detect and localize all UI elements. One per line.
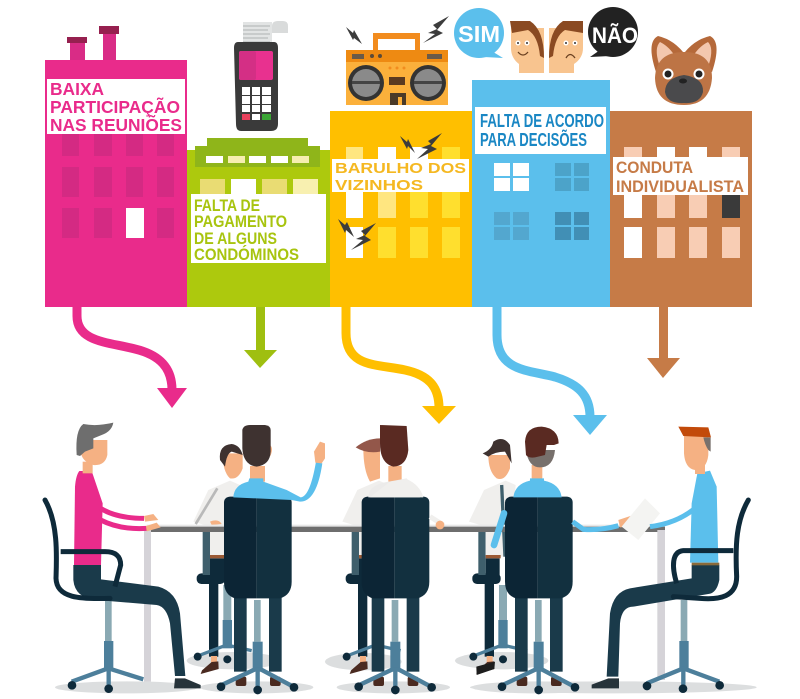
label: falta de pagamento: PAGAMENTO bbox=[194, 212, 287, 231]
person: blue shirt front right bbox=[494, 427, 638, 694]
meeting scene bbox=[45, 423, 757, 694]
icon: two faces bbox=[510, 21, 583, 73]
label: falta de acordo: PARA DECISÕES bbox=[480, 129, 587, 150]
icon: não speech bubble bbox=[588, 7, 638, 57]
building: conduta individualista (brown) bbox=[610, 111, 752, 307]
table leg right bbox=[657, 530, 665, 680]
label: baixa participação: BAIXA bbox=[50, 79, 104, 99]
person: orange hair at right bbox=[592, 427, 748, 693]
label: falta de acordo bbox=[475, 107, 606, 154]
arrow: pink bbox=[77, 307, 187, 408]
building: falta de pagamento (green) bbox=[187, 138, 330, 307]
building: falta de acordo (blue) bbox=[472, 80, 610, 307]
icon: sim speech bubble: SIM bbox=[458, 21, 500, 47]
label: baixa participação bbox=[47, 79, 185, 135]
table top bbox=[147, 525, 665, 532]
person: white shirt front centre bbox=[354, 425, 444, 694]
windows bbox=[62, 134, 174, 238]
label: conduta individualista bbox=[613, 157, 748, 196]
arrow: green bbox=[244, 307, 277, 368]
chimneys bbox=[67, 26, 119, 61]
arrow: blue bbox=[497, 307, 607, 435]
label: barulho dos vizinhos bbox=[332, 159, 469, 194]
person: blue shirt front left with raised arm bbox=[217, 425, 325, 694]
label: falta de pagamento bbox=[191, 194, 326, 264]
label: falta de pagamento: CONDÓMINOS bbox=[194, 245, 299, 264]
arrow: yellow bbox=[346, 307, 456, 424]
windows bbox=[624, 147, 740, 258]
building: baixa participação (pink) bbox=[45, 26, 187, 307]
table leg left bbox=[144, 528, 151, 682]
icon: dog bbox=[651, 36, 717, 105]
icon: noise bolts on windows bbox=[338, 133, 442, 250]
windows bbox=[200, 179, 318, 195]
arrow: brown bbox=[647, 307, 680, 378]
icon: boombox bbox=[346, 33, 448, 105]
icon: sim speech bubble bbox=[454, 8, 504, 58]
label: conduta individualista: INDIVIDUALISTA bbox=[616, 177, 744, 196]
label: falta de pagamento: FALTA DE bbox=[194, 196, 260, 215]
label: falta de pagamento: DE ALGUNS bbox=[194, 229, 277, 248]
icon: boombox bolts bbox=[346, 16, 449, 44]
label: baixa participação: NAS REUNIÕES bbox=[50, 114, 182, 135]
icon: payment terminal bbox=[234, 21, 288, 131]
person: seated behind left bbox=[193, 444, 252, 674]
person: seated behind right bbox=[469, 439, 527, 675]
label: barulho dos vizinhos: VIZINHOS bbox=[335, 177, 423, 194]
roof bbox=[195, 138, 320, 167]
label: falta de acordo: FALTA DE ACORDO bbox=[480, 110, 604, 131]
windows bbox=[494, 163, 589, 240]
label: barulho dos vizinhos: BARULHO DOS bbox=[335, 160, 466, 177]
person: pink shirt at left bbox=[45, 423, 201, 693]
label: baixa participação: PARTICIPAÇÃO bbox=[50, 96, 180, 117]
person: seated behind centre bbox=[342, 438, 401, 674]
label: conduta individualista: CONDUTA bbox=[616, 158, 693, 177]
icon: não speech bubble: NÃO bbox=[592, 23, 638, 48]
building: barulho dos vizinhos (yellow) bbox=[330, 111, 472, 307]
floor shadows bbox=[55, 652, 757, 693]
windows bbox=[346, 147, 460, 258]
